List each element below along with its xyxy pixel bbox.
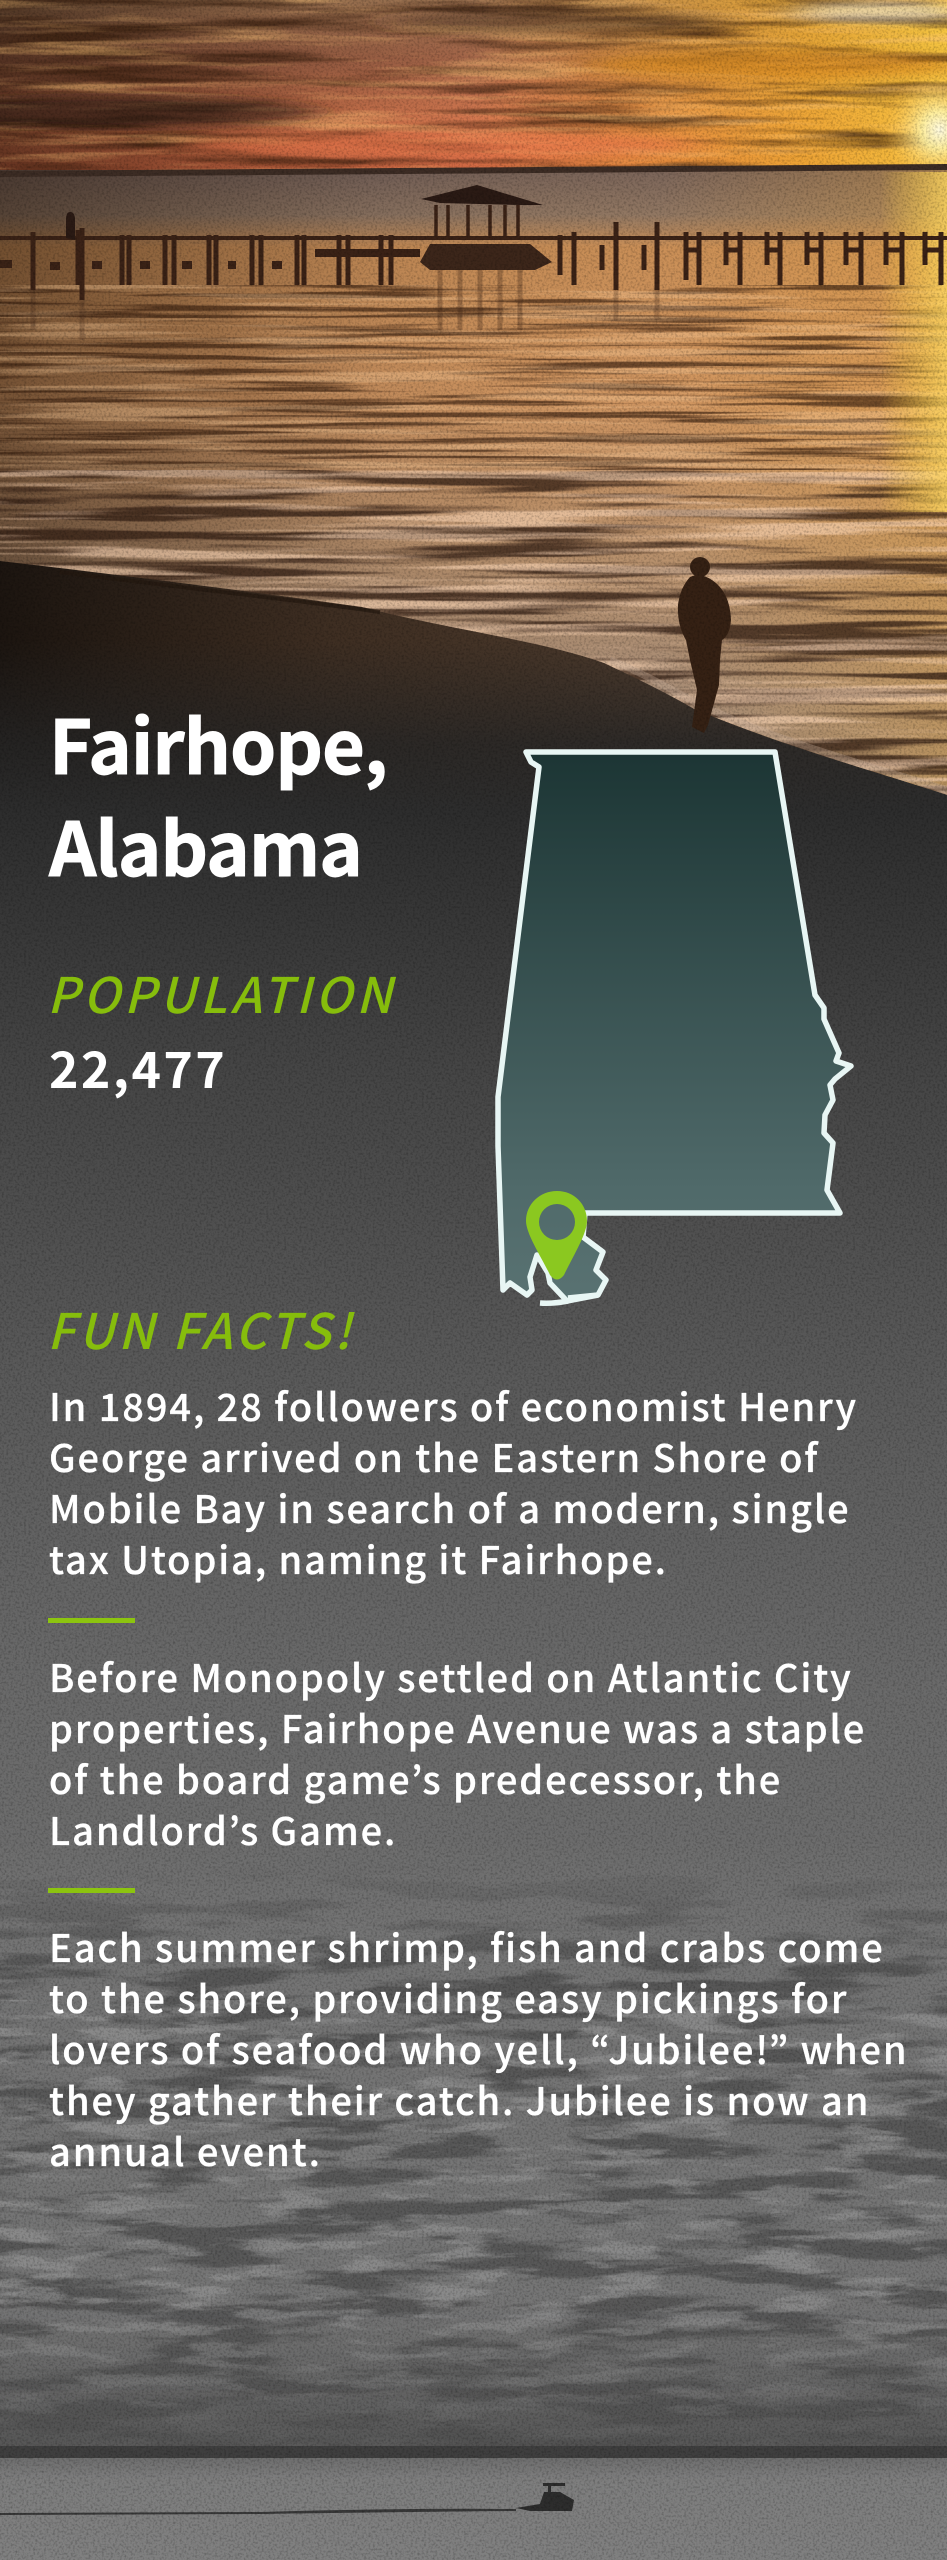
grey cloud photo <box>0 1908 947 2434</box>
fact 1: tax Utopia, naming it Fairhope. <box>49 1530 668 1585</box>
population number: 22,477 <box>49 1031 227 1103</box>
fact 2: Landlord’s Game. <box>49 1801 397 1856</box>
beach <box>0 561 947 812</box>
population label: POPULATION <box>47 957 396 1028</box>
shore fade to grey <box>0 561 947 812</box>
fact 1 <box>49 1377 858 1585</box>
fact 2: properties, Fairhope Avenue was a staple <box>49 1699 866 1754</box>
small boat with wake <box>0 2483 574 2515</box>
fact 3: annual event. <box>49 2122 322 2177</box>
fact 2: Before Monopoly settled on Atlantic City <box>49 1648 853 1703</box>
fun facts heading: FUN FACTS! <box>47 1293 355 1364</box>
fact 2 <box>49 1648 866 1856</box>
state outline <box>498 752 851 1301</box>
title: Alabama <box>49 791 362 898</box>
fact 1: Mobile Bay in search of a modern, single <box>49 1479 851 1534</box>
fact 1: In 1894, 28 followers of economist Henry <box>49 1377 858 1432</box>
divider 1 <box>48 1618 135 1623</box>
pier <box>0 222 947 340</box>
man walking on beach <box>678 557 731 733</box>
grey paper ground <box>0 690 947 1940</box>
title: Fairhope, <box>49 689 387 796</box>
fact 2: of the board game’s predecessor, the <box>49 1750 782 1805</box>
pier gazebo <box>420 185 552 330</box>
fact 1: George arrived on the Eastern Shore of <box>49 1428 819 1483</box>
fact 3 <box>49 1918 909 2177</box>
fisherman on pier <box>66 212 75 240</box>
fact 3: they gather their catch. Jubilee is now an <box>49 2071 870 2126</box>
grey water and treeline <box>0 2446 947 2560</box>
shoreline foam <box>60 572 947 790</box>
sunset sky <box>0 0 947 192</box>
location pin <box>526 1191 587 1280</box>
fact 3: lovers of seafood who yell, “Jubilee!” when <box>49 2020 909 2075</box>
fact 3: Each summer shrimp, fish and crabs come <box>49 1918 885 1973</box>
title <box>48 689 387 898</box>
bay coastline <box>540 1295 598 1303</box>
rippled bay water <box>0 164 947 812</box>
divider 2 <box>48 1888 135 1893</box>
fact 3: to the shore, providing easy pickings for <box>49 1969 848 2024</box>
